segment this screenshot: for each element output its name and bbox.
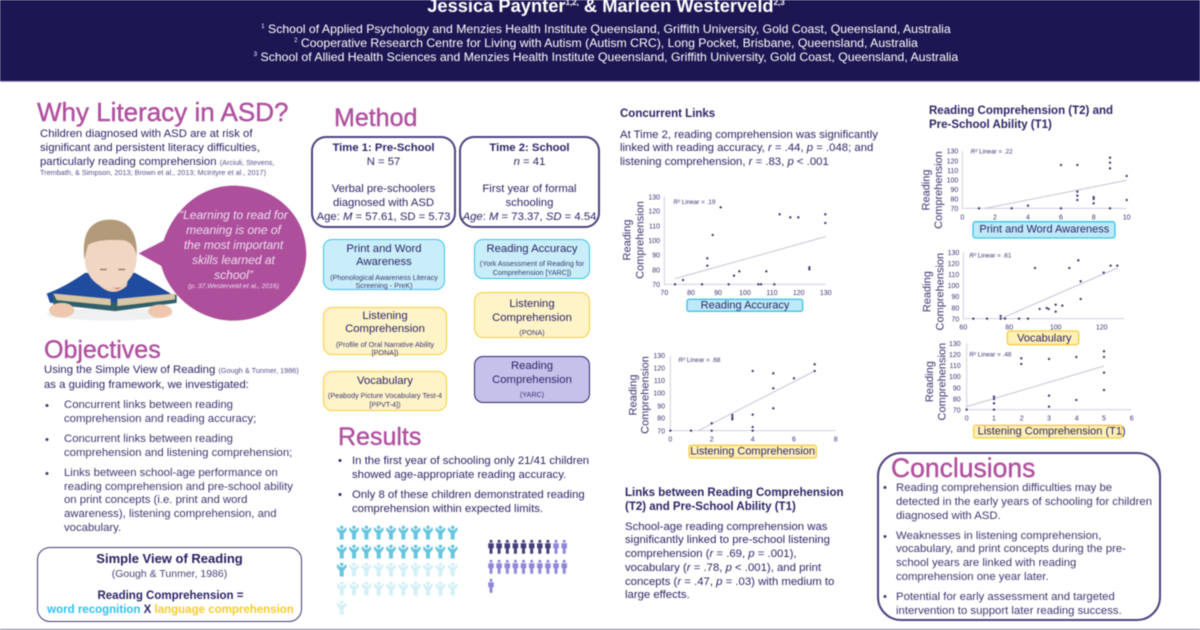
chart: reading accuracy scatter: 100 <box>648 238 660 245</box>
header banner <box>0 0 1200 82</box>
chart: listening comprehension scatter: 110 <box>654 378 665 385</box>
pictogram: 8 of 21 children <box>487 539 568 594</box>
text: why literacy intro: Children diagnosed with ASD are at risk of <box>40 128 252 140</box>
icon: boy reading a book <box>46 218 178 320</box>
measure: listening comprehension T1: (Profile of Oral Narrative Ability <box>336 340 434 349</box>
chart: print and word awareness scatter <box>920 148 1131 240</box>
chart: print and word awareness scatter: 100 <box>947 177 958 184</box>
text: objectives intro: as a guiding framework, we investigated: <box>44 379 249 391</box>
chart: listening comprehension scatter: Listening Comprehension <box>690 446 815 458</box>
heading: Method: Method <box>334 104 417 132</box>
list: objectives bullets: • <box>45 434 49 446</box>
panel: Time 1 pre-school <box>311 136 456 228</box>
affiliations: 2 Cooperative Research Centre for Living with Autism (Autism CRC), Long Pocket, Brisbane, Queensland, Australia <box>294 36 918 50</box>
chart: reading accuracy scatter <box>622 194 832 313</box>
chart: listening comprehension T1 scatter: Listening Comprehension (T1) <box>978 426 1126 438</box>
conclusions bullets: detected in the early years of schooling for children <box>896 496 1152 508</box>
conclusions bullets: comprehension one year later. <box>896 571 1049 583</box>
measure: listening comprehension T2: (PONA) <box>519 328 545 337</box>
chart: print and word awareness scatter: 10 <box>1123 214 1131 221</box>
list: objectives bullets: • <box>45 400 49 412</box>
chart: listening comprehension T1 scatter: 3 <box>1047 415 1051 422</box>
measure: reading comprehension: (YARC) <box>520 390 544 399</box>
chart: print and word awareness scatter: 120 <box>947 158 958 165</box>
list: objectives bullets <box>44 399 294 534</box>
panel: Time 1 pre-school: Age: M = 57.61, SD = 5.73 <box>317 211 450 223</box>
chart: print and word awareness scatter: R² Linear = .22 <box>971 149 1013 156</box>
panel title: Simple View of Reading <box>96 551 243 566</box>
text: why literacy intro: particularly reading comprehension (Arciuli, Stevens, <box>40 156 274 168</box>
measure: print and word awareness: Awareness <box>356 256 412 268</box>
measure: reading comprehension <box>474 356 590 403</box>
chart: listening comprehension scatter: 4 <box>751 437 755 444</box>
heading: reading comprehension T2 and pre-school ability T1: Reading Comprehension (T2) and <box>929 105 1113 117</box>
heading: links between reading comprehension and pre-school ability: Links between Reading Comprehension <box>625 487 844 499</box>
chart: print and word awareness scatter: Print and Word Awareness <box>979 223 1110 235</box>
chart: reading accuracy scatter: 110 <box>649 223 660 230</box>
chart: reading accuracy scatter: R² Linear = .19 <box>673 199 716 206</box>
measure: vocabulary: Vocabulary <box>357 374 413 386</box>
measure: listening comprehension T2 <box>474 292 590 338</box>
heading: links between reading comprehension and pre-school ability: (T2) and Pre-School Ability (T1) <box>625 500 796 512</box>
list: objectives bullets: reading comprehension and pre-school ability <box>64 481 293 493</box>
conclusions bullets <box>882 482 1152 618</box>
panel: Time 1 pre-school: Verbal pre-schoolers <box>332 183 435 195</box>
measure: reading accuracy: Comprehension [YARC]) <box>493 268 571 277</box>
text: why literacy intro <box>40 128 274 178</box>
panel: Time 2 school: Time 2: School <box>489 142 570 154</box>
measure: print and word awareness: (Phonological Awareness Literacy <box>330 273 438 282</box>
list: results bullets <box>338 455 590 516</box>
chart: print and word awareness scatter: 130 <box>947 149 958 156</box>
chart: reading accuracy scatter: 100 <box>739 290 751 297</box>
chart: vocabulary scatter: 100 <box>948 283 959 290</box>
heading: reading comprehension T2 and pre-school ability T1: Pre-School Ability (T1) <box>929 118 1052 130</box>
chart: listening comprehension T1 scatter: 4 <box>1075 415 1079 422</box>
chart: vocabulary scatter: 120 <box>948 261 959 268</box>
chart: vocabulary scatter: 110 <box>948 272 959 279</box>
measure: reading comprehension: Reading <box>511 360 553 372</box>
chart: listening comprehension scatter: 6 <box>792 437 796 444</box>
chart: print and word awareness scatter: 80 <box>951 197 958 204</box>
chart: listening comprehension scatter: 130 <box>653 353 665 360</box>
list: objectives bullets: comprehension and listening comprehension; <box>64 447 292 459</box>
chart: print and word awareness scatter: 6 <box>1059 214 1063 221</box>
conclusions bullets: diagnosed with ASD. <box>896 510 1001 522</box>
text: links paragraph <box>624 520 835 602</box>
chart: reading accuracy scatter: Reading Accuracy <box>701 300 790 312</box>
measure: listening comprehension T1 <box>323 307 447 355</box>
chart: vocabulary scatter: R² Linear = .61 <box>969 252 1012 259</box>
chart: listening comprehension T1 scatter: Reading <box>924 361 936 402</box>
measure: vocabulary <box>323 371 447 411</box>
list: results bullets: Only 8 of these children demonstrated reading <box>352 489 585 501</box>
list: objectives bullets: vocabulary. <box>64 522 121 534</box>
chart: reading accuracy scatter: 120 <box>648 209 660 216</box>
heading: Why Literacy in ASD?: Why Literacy in ASD? <box>37 97 288 127</box>
panel: Simple View of Reading <box>37 547 302 622</box>
chart: vocabulary scatter: Comprehension <box>935 253 947 330</box>
measure: print and word awareness: Screening - PreK) <box>355 281 413 290</box>
chart: listening comprehension T1 scatter: 110 <box>949 363 961 370</box>
list: objectives bullets: on print concepts (i.e. print and word <box>64 494 248 506</box>
conclusions bullets: Reading comprehension difficulties may be <box>896 482 1112 494</box>
list: objectives bullets: • <box>45 468 49 480</box>
chart: listening comprehension T1 scatter: 0 <box>965 415 969 422</box>
measure: listening comprehension T1: Listening <box>362 310 408 322</box>
chart: print and word awareness scatter: 8 <box>1092 214 1096 221</box>
measure: reading comprehension: Comprehension <box>492 374 572 386</box>
chart: reading accuracy scatter: 110 <box>766 290 778 297</box>
chart: print and word awareness scatter: 2 <box>993 214 997 221</box>
measure: print and word awareness: Print and Word <box>346 242 422 254</box>
list: results bullets: In the first year of schooling only 21/41 children <box>352 455 589 467</box>
chart: vocabulary scatter: Vocabulary <box>1017 333 1072 345</box>
text: why literacy intro: significant and persistent literacy difficulties, <box>40 142 260 154</box>
chart: listening comprehension scatter: 2 <box>710 437 714 444</box>
list: results bullets: • <box>338 489 342 501</box>
panel: Time 2 school: schooling <box>506 197 553 209</box>
chart: reading accuracy scatter: 120 <box>793 290 805 297</box>
panel: Conclusions <box>877 452 1161 621</box>
chart: listening comprehension scatter: 8 <box>834 437 838 444</box>
heading: Objectives: Objectives <box>44 336 161 364</box>
measure: vocabulary: (Peabody Picture Vocabulary Test-4 <box>328 391 442 400</box>
chart: listening comprehension scatter: 100 <box>653 391 665 398</box>
measure: vocabulary: [PPVT-4]) <box>369 400 401 409</box>
chart: vocabulary scatter: 100 <box>1050 324 1062 331</box>
conclusions bullets: • <box>883 530 887 542</box>
chart: listening comprehension scatter: 90 <box>657 403 665 410</box>
chart: listening comprehension T1 scatter: 80 <box>953 396 961 403</box>
chart: listening comprehension T1 scatter: 6 <box>1130 415 1134 422</box>
chart: listening comprehension T1 scatter: 90 <box>953 385 961 392</box>
panel: Time 2 school: First year of formal <box>482 183 577 195</box>
heading: links between reading comprehension and pre-school ability <box>624 486 844 514</box>
conclusions bullets: • <box>883 591 887 603</box>
chart: listening comprehension T1 scatter: R² Linear = .48 <box>969 352 1012 359</box>
chart: vocabulary scatter: 130 <box>948 250 959 257</box>
quote text: the most important <box>184 238 283 252</box>
affiliations: 3 School of Allied Health Sciences and Menzies Health Institute Queensland, Griffith University, Gold Coast, Queensland, Australia <box>254 50 958 64</box>
panel formula: Reading Comprehension = <box>97 590 244 602</box>
panel citation: (Gough & Tunmer, 1986) <box>112 568 227 580</box>
list: results bullets: showed age-appropriate reading accuracy. <box>352 469 566 481</box>
chart: reading accuracy scatter: 90 <box>652 253 660 260</box>
chart: reading accuracy scatter: 90 <box>714 290 722 297</box>
conclusions heading: Conclusions <box>891 453 1035 483</box>
conclusions bullets: • <box>883 482 887 494</box>
text: objectives intro: Using the Simple View of Reading (Gough & Tunmer, 1986) <box>44 364 299 376</box>
measure: listening comprehension T1: Comprehension <box>345 323 425 335</box>
measure: print and word awareness <box>323 239 445 290</box>
text: concurrent links <box>620 128 878 168</box>
chart: vocabulary scatter: 120 <box>1096 324 1108 331</box>
list: objectives bullets: awareness), listening comprehension, and <box>64 508 277 520</box>
chart: print and word awareness scatter: Comprehension <box>933 151 945 229</box>
list: results bullets: • <box>338 455 342 467</box>
chart: print and word awareness scatter: 70 <box>951 206 958 213</box>
affiliations <box>254 22 959 64</box>
chart: print and word awareness scatter: 110 <box>947 168 958 175</box>
text: why literacy intro: Trembath, & Simpson, 2013; Brown et al., 2013; McIntyre et al., 2017) <box>40 168 266 177</box>
chart: vocabulary scatter: 60 <box>959 324 967 331</box>
chart: print and word awareness scatter: Reading <box>921 170 933 210</box>
chart: vocabulary scatter: 90 <box>952 294 959 301</box>
list: results bullets: comprehension within expected limits. <box>352 503 543 515</box>
chart: listening comprehension T1 scatter: 1 <box>992 415 996 422</box>
panel formula: word recognition X language comprehension <box>47 604 294 616</box>
panel: Time 1 pre-school: N = 57 <box>367 156 400 168</box>
chart: listening comprehension scatter: 120 <box>653 366 665 373</box>
chart: vocabulary scatter: 80 <box>1005 324 1013 331</box>
text: links paragraph: large effects. <box>625 589 690 601</box>
text: links paragraph: comprehension (r = .69, p = .001), <box>625 548 797 560</box>
chart: listening comprehension T1 scatter: 2 <box>1020 415 1024 422</box>
chart: reading accuracy scatter: Comprehension <box>635 201 647 279</box>
chart: reading accuracy scatter: 70 <box>652 282 660 289</box>
measure: reading accuracy <box>474 239 590 279</box>
chart: listening comprehension T1 scatter: 5 <box>1102 415 1106 422</box>
heading: reading comprehension T2 and pre-school ability T1 <box>928 104 1113 132</box>
chart: listening comprehension scatter <box>627 352 838 460</box>
chart: listening comprehension scatter: 0 <box>668 437 672 444</box>
chart: listening comprehension T1 scatter: 70 <box>953 407 961 414</box>
measure: reading accuracy: (York Assessment of Reading for <box>480 259 584 268</box>
text: links paragraph: concepts (r = .47, p = .03) with medium to <box>625 576 834 588</box>
chart: listening comprehension T1 scatter: 100 <box>949 374 961 381</box>
heading: Results: Results <box>338 423 421 451</box>
measure: reading accuracy: Reading Accuracy <box>486 242 578 254</box>
chart: listening comprehension T1 scatter: 120 <box>949 352 961 359</box>
chart: listening comprehension scatter: 80 <box>657 416 665 423</box>
chart: print and word awareness scatter: 90 <box>951 187 958 194</box>
chart: reading accuracy scatter: 80 <box>687 290 695 297</box>
panel formula <box>46 589 294 616</box>
chart: listening comprehension T1 scatter: 130 <box>949 341 961 348</box>
panel: Time 1 pre-school: diagnosed with ASD <box>333 197 434 209</box>
text: concurrent links: listening comprehension, r = .83, p < .001 <box>620 156 829 168</box>
measure: listening comprehension T1: [PONA]) <box>372 348 398 357</box>
chart: listening comprehension scatter: R² Linear = .68 <box>678 357 721 364</box>
text: concurrent links: At Time 2, reading comprehension was significantly <box>620 128 878 140</box>
conclusions bullets: Potential for early assessment and targeted <box>896 591 1115 603</box>
chart: print and word awareness scatter: 4 <box>1026 214 1030 221</box>
chart: listening comprehension T1 scatter <box>924 340 1134 440</box>
text: objectives intro <box>44 364 300 392</box>
affiliations: 1 School of Applied Psychology and Menzies Health Institute Queensland, Griffith University, Gold Coast, Queensland, Australia <box>261 22 951 36</box>
text: links paragraph: significantly linked to pre-school listening <box>625 534 830 546</box>
chart: listening comprehension scatter: Reading <box>627 375 639 415</box>
chart: reading accuracy scatter: 80 <box>652 267 660 274</box>
chart: listening comprehension scatter: 70 <box>657 428 665 435</box>
quote text: skills learned at <box>192 253 275 267</box>
chart: reading accuracy scatter: Reading <box>622 220 634 260</box>
text: concurrent links: linked with reading accuracy, r = .44, p = .048; and <box>620 142 873 154</box>
pictogram: 21 of 41 children <box>336 525 458 615</box>
chart: print and word awareness scatter: 0 <box>960 214 964 221</box>
list: objectives bullets: Concurrent links between reading <box>64 433 233 445</box>
list: objectives bullets: Concurrent links between reading <box>64 399 233 411</box>
conclusions bullets: school years are linked with reading <box>896 557 1076 569</box>
text: links paragraph: School-age reading comprehension was <box>625 520 827 532</box>
conclusions bullets: Weaknesses in listening comprehension, <box>896 530 1101 542</box>
chart: reading accuracy scatter: 130 <box>820 290 832 297</box>
panel: Time 2 school: Age: M = 73.37, SD = 4.54 <box>463 211 596 223</box>
chart: listening comprehension scatter: Comprehension <box>640 356 652 434</box>
quote text <box>179 208 289 290</box>
heading: Concurrent Links: Concurrent Links <box>620 108 715 120</box>
quote text: school” <box>214 268 253 282</box>
chart: vocabulary scatter: 70 <box>952 316 959 323</box>
quote text: meaning is one of <box>186 223 281 237</box>
chart: vocabulary scatter: Reading <box>921 271 933 312</box>
chart: vocabulary scatter <box>921 249 1124 346</box>
chart: listening comprehension T1 scatter: Comprehension <box>936 343 948 420</box>
quote text: (p. 37,Westerveld et al., 2016) <box>188 283 279 290</box>
chart: reading accuracy scatter: 70 <box>660 290 668 297</box>
quote text: “Learning to read for <box>179 208 288 222</box>
list: objectives bullets: Links between school-age performance on <box>64 467 278 479</box>
panel: Time 2 school <box>459 136 600 228</box>
chart: vocabulary scatter: 80 <box>952 305 959 312</box>
conclusions bullets: vocabulary, and print concepts during the pre- <box>896 543 1126 555</box>
list: objectives bullets: comprehension and reading accuracy; <box>64 413 256 425</box>
measure: listening comprehension T2: Listening <box>509 298 555 310</box>
panel: Time 2 school: n = 41 <box>514 156 545 168</box>
conclusions bullets: intervention to support later reading success. <box>896 605 1122 617</box>
measure: listening comprehension T2: Comprehension <box>492 312 572 324</box>
text: links paragraph: vocabulary (r = .78, p < .001), and print <box>625 562 821 574</box>
panel: Time 1 pre-school: Time 1: Pre-School <box>332 142 435 154</box>
callout: quote bubble <box>138 184 308 322</box>
chart: reading accuracy scatter: 130 <box>648 194 660 201</box>
